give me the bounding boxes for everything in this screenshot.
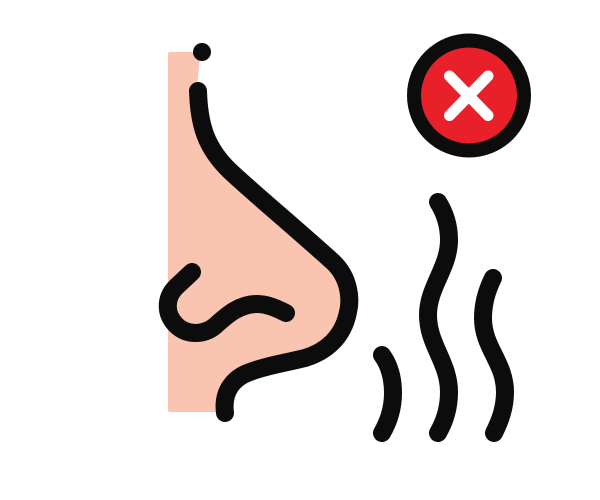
- nose outline: [198, 91, 349, 413]
- left wave: [382, 355, 393, 433]
- smell waves: [382, 202, 505, 433]
- nostril outline: [168, 272, 286, 333]
- cross badge: [414, 40, 524, 150]
- right wave: [483, 278, 505, 433]
- badge circle: [414, 40, 524, 150]
- middle wave: [428, 202, 449, 433]
- nose skin fill: [168, 52, 349, 412]
- nose tip dot: [193, 43, 211, 61]
- white cross: [450, 76, 488, 116]
